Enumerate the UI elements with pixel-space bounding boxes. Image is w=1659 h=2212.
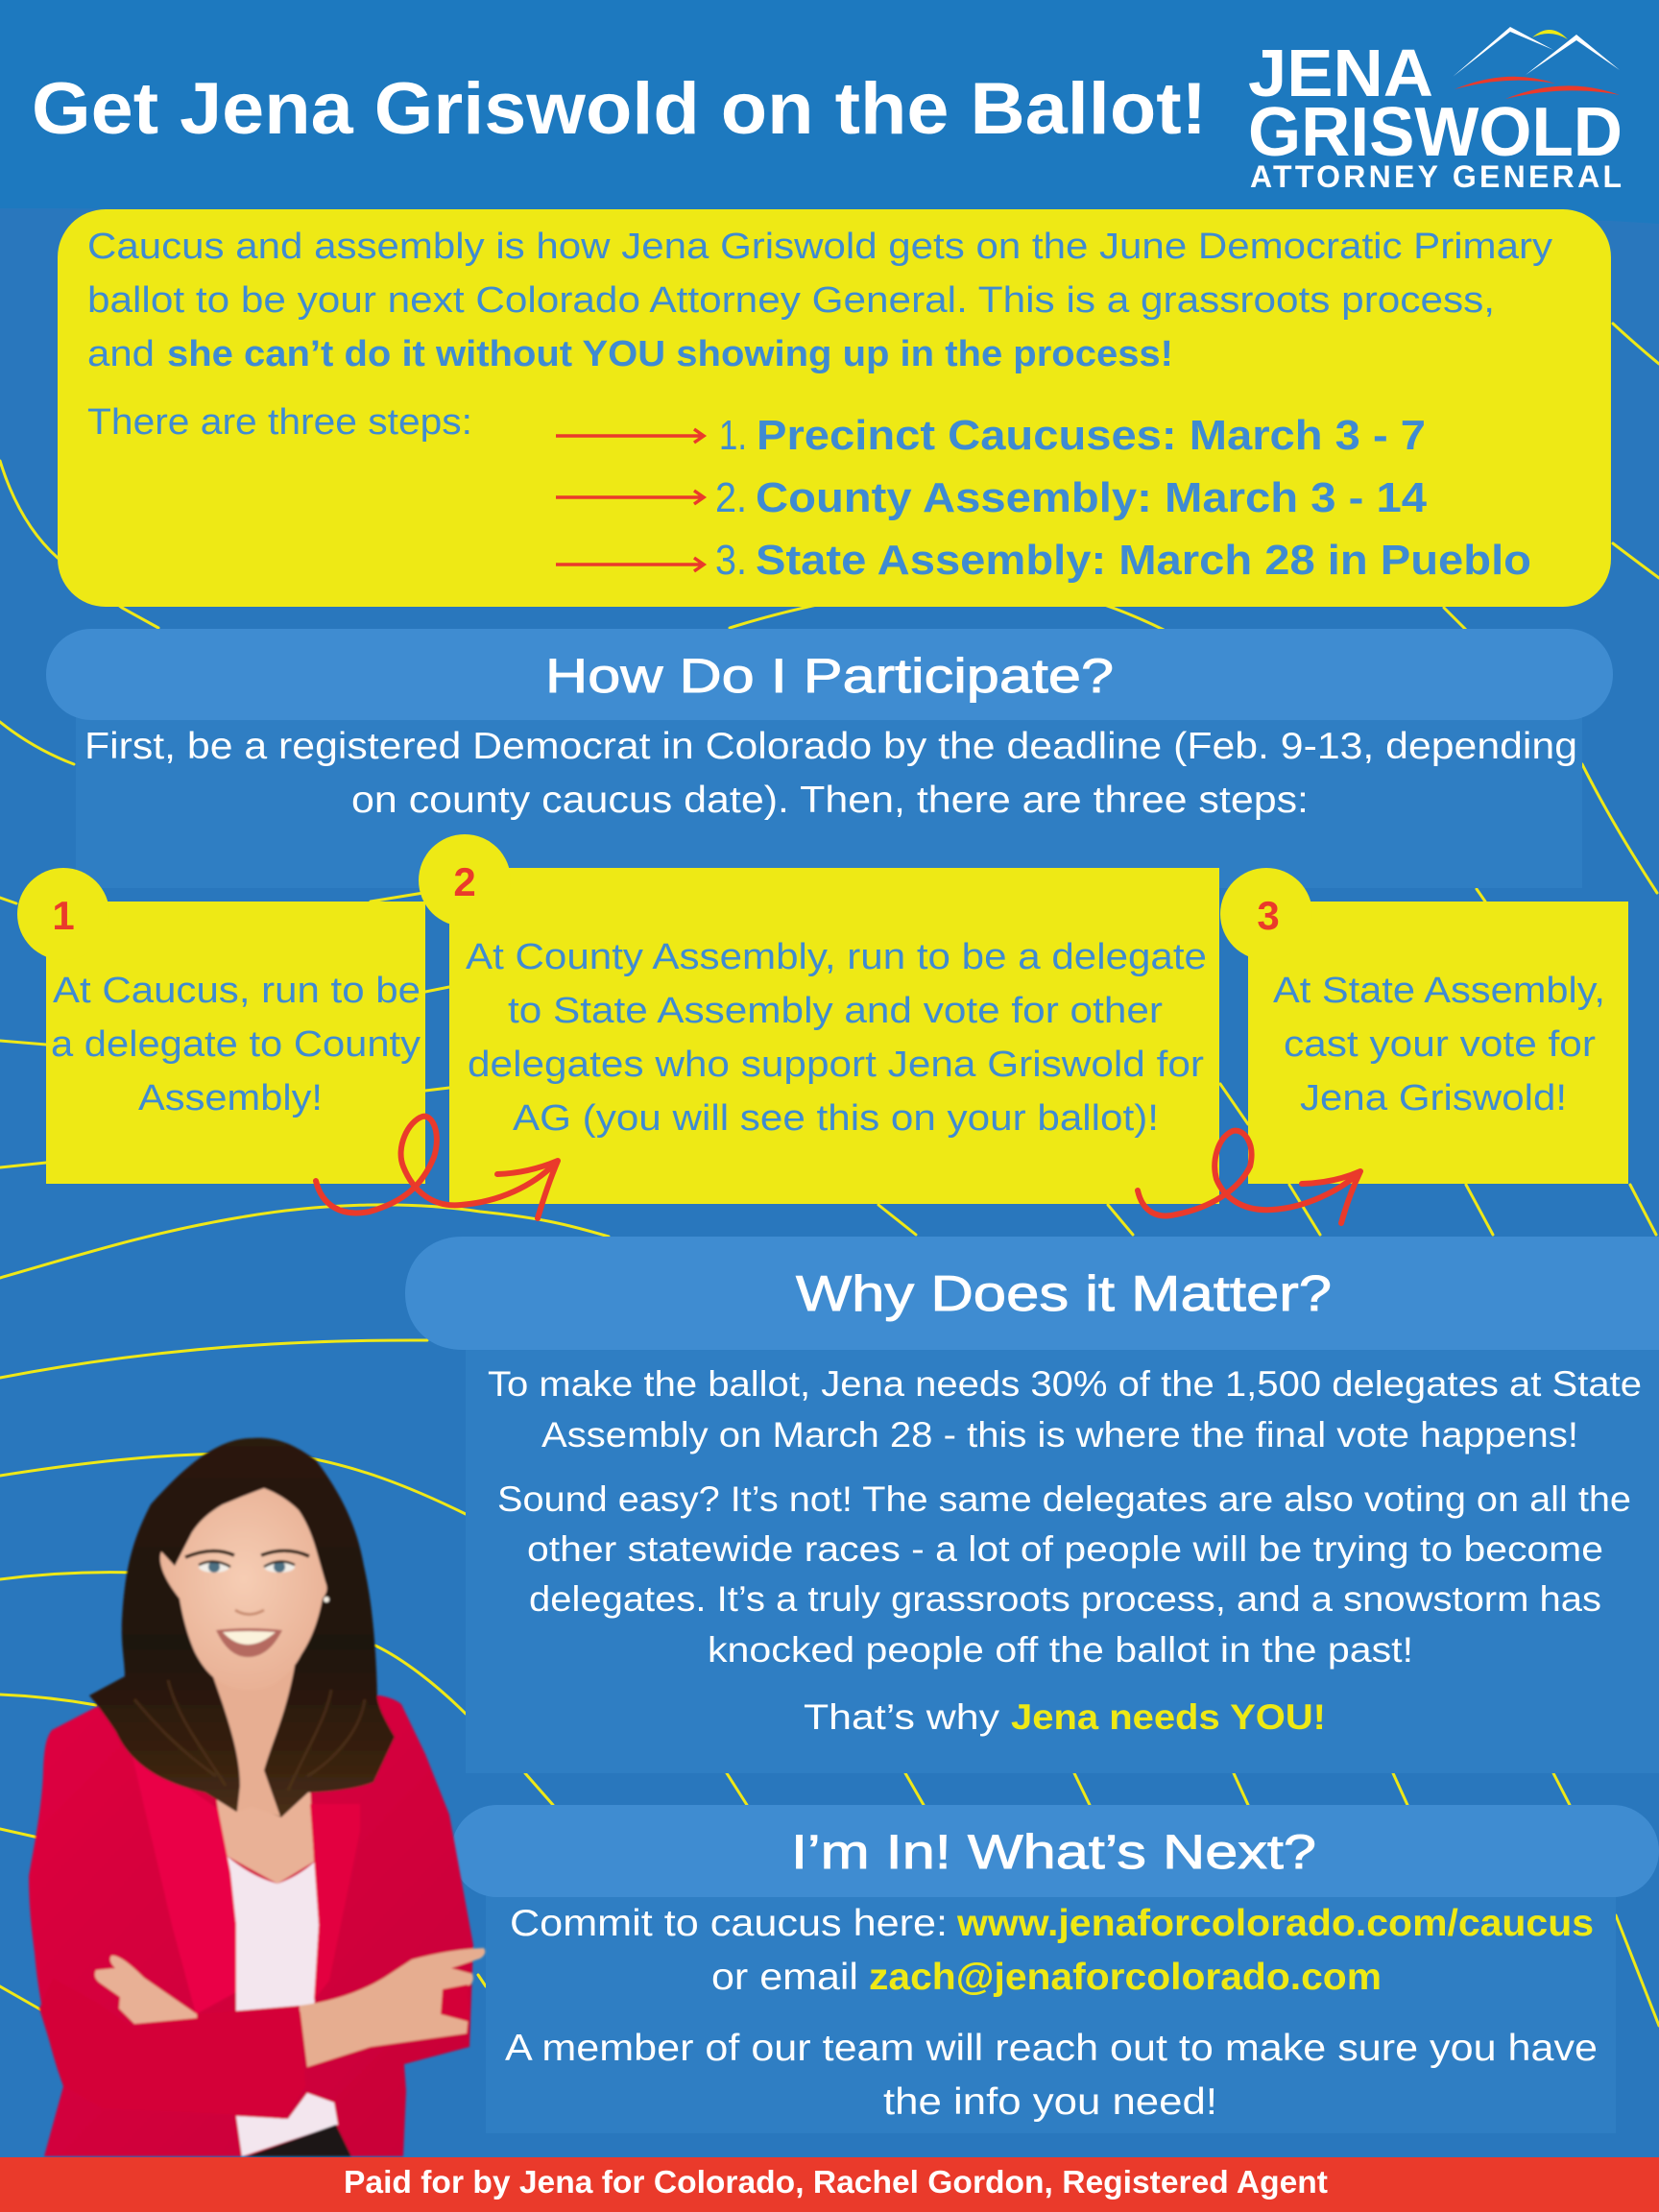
step 2 text: delegates who support Jena Griswold for xyxy=(468,1045,1204,1085)
heading: I’m In! What’s Next? xyxy=(791,1825,1316,1879)
step 2 date: 2. xyxy=(715,474,747,521)
step 3 date: State Assembly: March 28 in Pueblo xyxy=(756,537,1531,584)
title: Get Jena Griswold on the Ballot! xyxy=(32,68,1207,150)
campaign logo: ATTORNEY GENERAL xyxy=(1250,159,1622,194)
smile xyxy=(216,1628,282,1657)
commit link: www.jenaforcolorado.com/caucus xyxy=(956,1903,1594,1944)
step 1 date: 1. xyxy=(719,412,747,459)
callout: Jena needs you: Jena needs YOU! xyxy=(1011,1697,1326,1737)
paragraph: competition: knocked people off the ballot in the past! xyxy=(708,1630,1413,1670)
arrow: step 2 xyxy=(556,491,704,504)
header band xyxy=(0,0,1659,224)
intro paragraph: and xyxy=(87,334,155,374)
step 3 text: cast your vote for xyxy=(1284,1024,1596,1065)
intro paragraph: ballot to be your next Colorado Attorney General. This is a grassroots process, xyxy=(87,280,1495,321)
step 3 text: At State Assembly, xyxy=(1273,971,1605,1011)
follow-up note: the info you need! xyxy=(883,2081,1217,2123)
card: step 3 xyxy=(1220,868,1628,1184)
number 3: 3 xyxy=(1257,893,1280,938)
commit link: Commit to caucus here: xyxy=(510,1903,948,1944)
arrow: step 3 xyxy=(556,558,704,571)
arrow: step 1 to step 2 xyxy=(316,1117,558,1218)
earring xyxy=(324,1597,329,1602)
heading: How Do I Participate? xyxy=(545,649,1114,703)
nose xyxy=(235,1610,264,1615)
step 1 date: Precinct Caucuses: March 3 - 7 xyxy=(757,412,1426,459)
footer band xyxy=(0,2157,1659,2212)
step 2 text: At County Assembly, run to be a delegate xyxy=(466,937,1207,977)
paragraph: competition: delegates. It’s a truly grassroots process, and a snowstorm has xyxy=(529,1579,1601,1619)
eyes and brows xyxy=(185,1551,309,1573)
heading: Why Does it Matter? xyxy=(796,1266,1332,1322)
campaign logo: JENA xyxy=(1248,36,1433,110)
step 1 text: a delegate to County xyxy=(51,1024,421,1065)
step 1 text: Assembly! xyxy=(138,1078,323,1118)
panel: why does it matter xyxy=(405,1237,1659,1773)
number 2: 2 xyxy=(453,859,476,904)
step 2 text xyxy=(466,937,1207,1139)
three steps label: There are three steps: xyxy=(87,402,472,443)
instructions: on county caucus date). Then, there are three steps: xyxy=(351,780,1309,821)
paragraph: competition xyxy=(497,1479,1631,1670)
callout: Jena needs you xyxy=(804,1697,1326,1737)
email link: zach@jenaforcolorado.com xyxy=(869,1957,1382,1998)
panel: intro xyxy=(58,209,1611,607)
chest xyxy=(206,1728,314,1884)
panel: how do I participate xyxy=(46,629,1613,888)
instructions xyxy=(84,726,1577,821)
arrow: step 2 to step 3 xyxy=(1138,1131,1360,1223)
number 1: 1 xyxy=(52,893,75,938)
jacket xyxy=(29,1695,473,2156)
step 2 text: to State Assembly and vote for other xyxy=(508,991,1163,1031)
arrow: step 1 xyxy=(556,429,704,443)
hair highlights xyxy=(134,1680,365,1791)
step 3 text: Jena Griswold! xyxy=(1300,1078,1567,1118)
step 3 text xyxy=(1273,971,1605,1118)
campaign logo xyxy=(1248,27,1623,194)
email link: or email xyxy=(711,1957,858,1998)
blouse xyxy=(227,1856,319,2011)
paragraph: delegates needed xyxy=(488,1364,1642,1455)
callout: Jena needs you: That’s why xyxy=(804,1697,1000,1737)
gap between fingers xyxy=(441,1984,469,2022)
instructions: First, be a registered Democrat in Colorado by the deadline (Feb. 9-13, depending xyxy=(84,726,1577,767)
lapel right xyxy=(310,1804,360,2000)
face xyxy=(160,1488,326,1690)
step 3 date: 3. xyxy=(715,537,747,584)
intro paragraph: Caucus and assembly is how Jena Griswold gets on the June Democratic Primary xyxy=(87,227,1552,267)
step 1 text xyxy=(51,971,421,1118)
neck xyxy=(209,1666,295,1816)
disclaimer: Paid for by Jena for Colorado, Rachel Gordon, Registered Agent xyxy=(344,2164,1328,2200)
belt xyxy=(247,2125,351,2156)
card: step 1 xyxy=(17,868,425,1184)
campaign logo: GRISWOLD xyxy=(1248,94,1623,171)
panel: I'm in, what's next xyxy=(451,1805,1659,2133)
paragraph: competition: other statewide races - a lot of people will be trying to become xyxy=(527,1529,1603,1569)
lapel left xyxy=(131,1748,236,2014)
lower blouse xyxy=(236,2093,338,2156)
follow-up note xyxy=(505,2028,1598,2123)
step 1 text: At Caucus, run to be xyxy=(53,971,421,1011)
hair xyxy=(89,1438,395,1817)
portrait of Jena Griswold xyxy=(29,1438,485,2156)
paragraph: competition: Sound easy? It’s not! The same delegates are also voting on all the xyxy=(497,1479,1631,1519)
intro paragraph xyxy=(87,227,1552,374)
commit link xyxy=(510,1903,1594,1944)
paragraph: delegates needed: Assembly on March 28 - this is where the final vote happens! xyxy=(541,1415,1578,1455)
intro paragraph: she can’t do it without YOU showing up in the process! xyxy=(167,334,1173,374)
paragraph: delegates needed: To make the ballot, Jena needs 30% of the 1,500 delegates at State xyxy=(488,1364,1642,1404)
step 2 text: AG (you will see this on your ballot)! xyxy=(513,1098,1159,1139)
crossed sleeve xyxy=(39,1978,305,2119)
right hand xyxy=(300,1948,485,2067)
left hand xyxy=(95,1956,197,2024)
follow-up note: A member of our team will reach out to make sure you have xyxy=(505,2028,1598,2069)
step 2 date: County Assembly: March 3 - 14 xyxy=(756,474,1428,521)
card: step 2 xyxy=(419,834,1219,1204)
